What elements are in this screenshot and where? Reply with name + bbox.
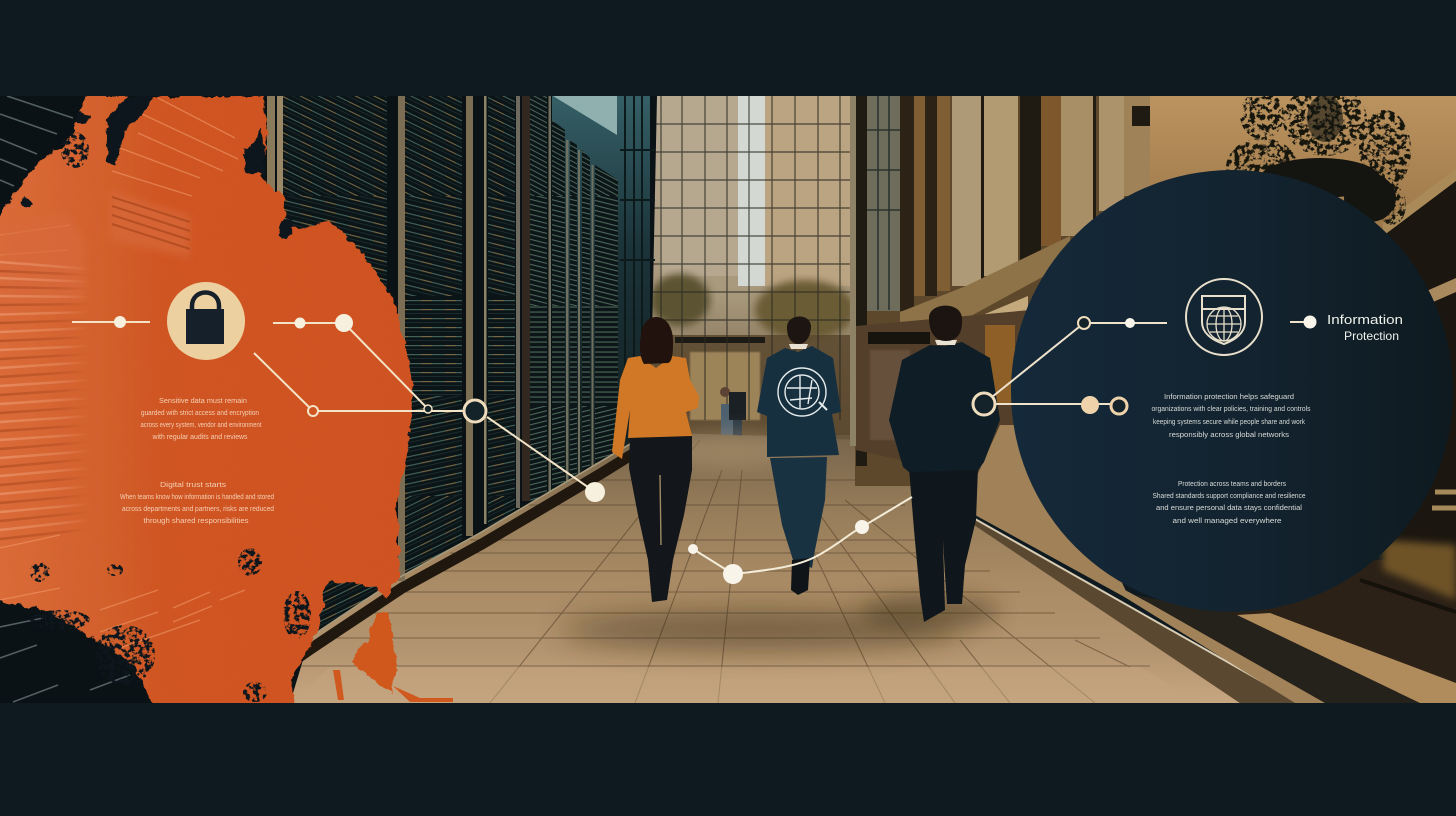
top-left slanted rack lines bbox=[0, 96, 130, 702]
left server-wall building bbox=[0, 96, 657, 703]
figure: woman in orange jacket bbox=[612, 317, 699, 602]
left text block 2: When teams know how information is handled and stored bbox=[120, 494, 274, 501]
collar bbox=[935, 340, 957, 345]
left text block 2: through shared responsibilities bbox=[144, 518, 249, 525]
icon: tree foliage bbox=[1226, 84, 1411, 225]
distant pedestrians bbox=[720, 387, 746, 436]
hair bbox=[640, 317, 673, 364]
left text block 1: with regular audits and reviews bbox=[152, 434, 248, 441]
pillars and strips bbox=[267, 96, 594, 581]
right text block 1: responsibly across global networks bbox=[1169, 432, 1290, 439]
left connector lines bbox=[72, 314, 605, 502]
back emblem bbox=[778, 368, 827, 416]
infographic canvas bbox=[0, 96, 1456, 703]
near tile highlights bbox=[490, 667, 1130, 703]
collar bbox=[789, 344, 808, 349]
photo band bbox=[0, 84, 1456, 710]
orange paint splash panel bbox=[0, 96, 453, 710]
right text block 2: and ensure personal data stays confidential bbox=[1156, 505, 1302, 512]
right floor edge and glass reflection bbox=[965, 425, 1456, 703]
left text block 1 bbox=[140, 398, 262, 441]
right glass buildings bbox=[850, 96, 1155, 486]
head bbox=[787, 316, 811, 344]
right text block 2: and well managed everywhere bbox=[1172, 518, 1282, 525]
head bbox=[929, 306, 962, 341]
trousers bbox=[770, 457, 827, 568]
icon: padlock badge bbox=[167, 282, 245, 360]
faded server slats in splash bbox=[0, 98, 245, 648]
walkway shadows bbox=[560, 610, 960, 650]
right text block 2 bbox=[1152, 481, 1306, 525]
left text block 1: guarded with strict access and encryption bbox=[141, 410, 259, 417]
jacket bbox=[757, 346, 841, 457]
dark splatter marks bbox=[21, 96, 293, 238]
left text block 1: Sensitive data must remain bbox=[159, 398, 247, 405]
jacket bbox=[889, 342, 1000, 472]
right text block 2: Shared standards support compliance and resilience bbox=[1152, 493, 1306, 500]
walkway floor bbox=[250, 432, 1240, 703]
left text block 2: Digital trust starts bbox=[160, 482, 227, 489]
label: Information Protection bbox=[1327, 312, 1403, 343]
figure: man with globe emblem bbox=[757, 316, 841, 595]
building base shadow bbox=[302, 450, 630, 662]
left text block 2 bbox=[120, 482, 274, 525]
label: Information Protection: Information bbox=[1327, 312, 1403, 327]
right text block 1: organizations with clear policies, training and controls bbox=[1152, 406, 1311, 413]
left text block 2: across departments and partners, risks are reduced bbox=[122, 506, 274, 513]
far glass facade bbox=[552, 96, 650, 490]
server rack slats bbox=[283, 96, 618, 626]
server slat lines down left edge bbox=[0, 260, 80, 532]
right text block 2: Protection across teams and borders bbox=[1178, 481, 1286, 488]
storefront street reflection bbox=[856, 310, 1030, 480]
navy circle panel bbox=[1011, 170, 1453, 612]
figure: man in dark suit bbox=[889, 306, 1000, 622]
icon: shield with globe bbox=[1186, 279, 1262, 355]
label: Information Protection: Protection bbox=[1344, 329, 1399, 343]
base trim bbox=[318, 443, 630, 632]
orange drip on floor bbox=[350, 613, 397, 694]
center walkway node curve bbox=[688, 497, 912, 584]
left text block 1: across every system, vendor and environment bbox=[140, 422, 262, 429]
jacket bbox=[612, 356, 699, 459]
background city glass atrium bbox=[651, 96, 850, 440]
right text block 1: keeping systems secure while people share and work bbox=[1153, 419, 1305, 426]
right text block 1 bbox=[1152, 394, 1311, 439]
right text block 1: Information protection helps safeguard bbox=[1164, 394, 1294, 401]
right warm wall bbox=[1150, 96, 1456, 550]
trousers bbox=[629, 436, 692, 602]
right connector lines bbox=[973, 316, 1316, 415]
trousers bbox=[909, 468, 978, 622]
awning bbox=[900, 236, 1070, 330]
